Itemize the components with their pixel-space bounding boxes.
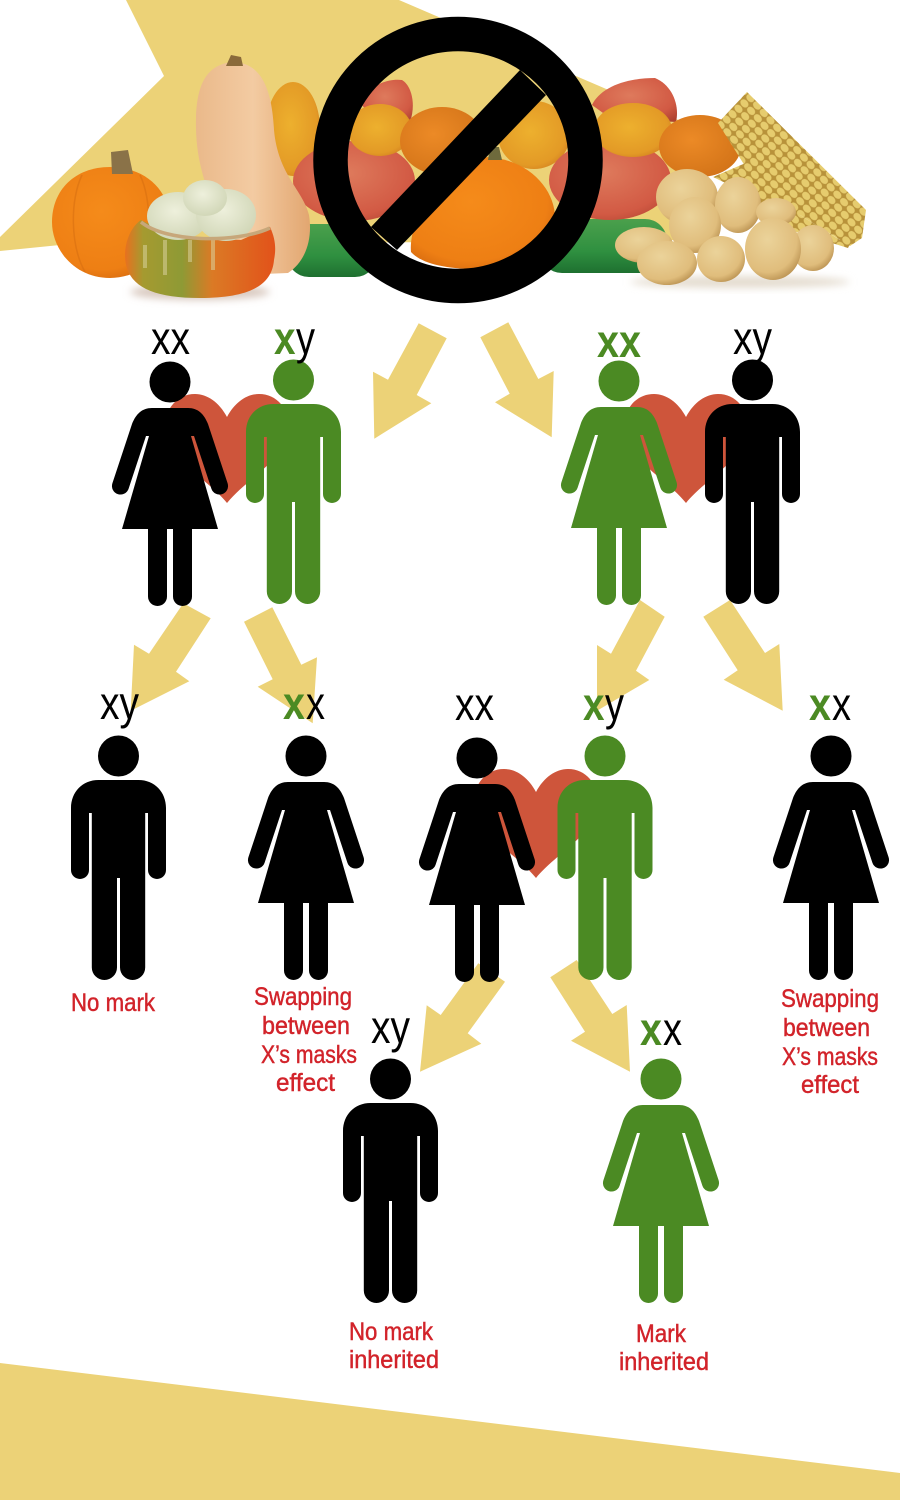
caption: no mark inherited bbox=[349, 1318, 439, 1374]
arrow: to daughter, third couple bbox=[550, 960, 630, 1072]
caption: mark inherited: Mark bbox=[636, 1320, 686, 1348]
caption: swapping right: X’s masks bbox=[782, 1043, 878, 1071]
figure: grandson bbox=[343, 1058, 438, 1303]
label: green x, y bbox=[274, 312, 315, 364]
caption: swapping left bbox=[254, 983, 357, 1097]
figure: son without mark bbox=[71, 736, 166, 980]
caption: swapping right: effect bbox=[801, 1071, 859, 1099]
background: yellow band bottom bbox=[0, 1363, 900, 1500]
caption: swapping left: between bbox=[262, 1012, 350, 1040]
arrow: to son, third couple bbox=[420, 963, 505, 1072]
label: green x, x right daughter: x bbox=[832, 678, 851, 730]
illustration: vegetables bbox=[52, 55, 866, 300]
arrow: to right couple bbox=[480, 322, 554, 437]
label: xy son: xy bbox=[100, 677, 139, 729]
label: green x, x right daughter: x bbox=[809, 678, 831, 730]
caption: swapping right: Swapping bbox=[781, 985, 879, 1013]
label: xy grandson: xy bbox=[371, 1001, 410, 1053]
label: green x, y: x bbox=[274, 312, 296, 364]
arrow: to daughter, right couple bbox=[703, 600, 783, 711]
label: green xx: xx bbox=[597, 315, 641, 367]
caption: mark inherited: inherited bbox=[619, 1348, 709, 1376]
arrow: to left couple bbox=[373, 323, 447, 439]
label: green x, y: y bbox=[296, 312, 315, 364]
couple: black woman and green man bbox=[112, 360, 341, 606]
label: xx second generation: xx bbox=[455, 678, 494, 730]
caption: swapping right bbox=[781, 985, 879, 1099]
caption: swapping right: between bbox=[783, 1014, 870, 1042]
couple: green woman and black man bbox=[561, 360, 800, 605]
figure: daughter right bbox=[773, 736, 889, 980]
label: green x, y second generation: y bbox=[605, 678, 624, 730]
label: green x, y second generation bbox=[583, 678, 624, 730]
figure: granddaughter with mark bbox=[603, 1058, 719, 1303]
label: green x, y second generation: x bbox=[583, 678, 605, 730]
caption: no mark inherited: inherited bbox=[349, 1346, 439, 1374]
caption: no mark: No mark bbox=[71, 989, 155, 1017]
caption: swapping left: X’s masks bbox=[261, 1041, 357, 1069]
label: green x, x granddaughter: x bbox=[663, 1003, 682, 1055]
label: green x, x granddaughter bbox=[640, 1003, 682, 1055]
label: xx: xx bbox=[151, 312, 190, 364]
label: green x, x daughter bbox=[283, 677, 325, 729]
label: green x, x daughter: x bbox=[306, 677, 325, 729]
arrow: to daughter, left couple bbox=[244, 607, 317, 723]
figure: daughter left bbox=[248, 736, 364, 980]
arrow: to son, right couple bbox=[597, 600, 665, 711]
background: yellow star shape top bbox=[0, 0, 690, 251]
couple: black woman and green man, second generation bbox=[419, 736, 652, 982]
caption: swapping left: Swapping bbox=[254, 983, 352, 1011]
label: green x, x daughter: x bbox=[283, 677, 305, 729]
label: green x, x granddaughter: x bbox=[640, 1003, 662, 1055]
arrow: to son, left couple bbox=[131, 603, 211, 711]
caption: swapping left: effect bbox=[276, 1069, 335, 1097]
icon: prohibition sign bbox=[330, 34, 586, 286]
caption: no mark inherited: No mark bbox=[349, 1318, 433, 1346]
label: xy: xy bbox=[733, 312, 772, 364]
label: green x, x right daughter bbox=[809, 678, 851, 730]
caption: mark inherited bbox=[619, 1320, 709, 1376]
